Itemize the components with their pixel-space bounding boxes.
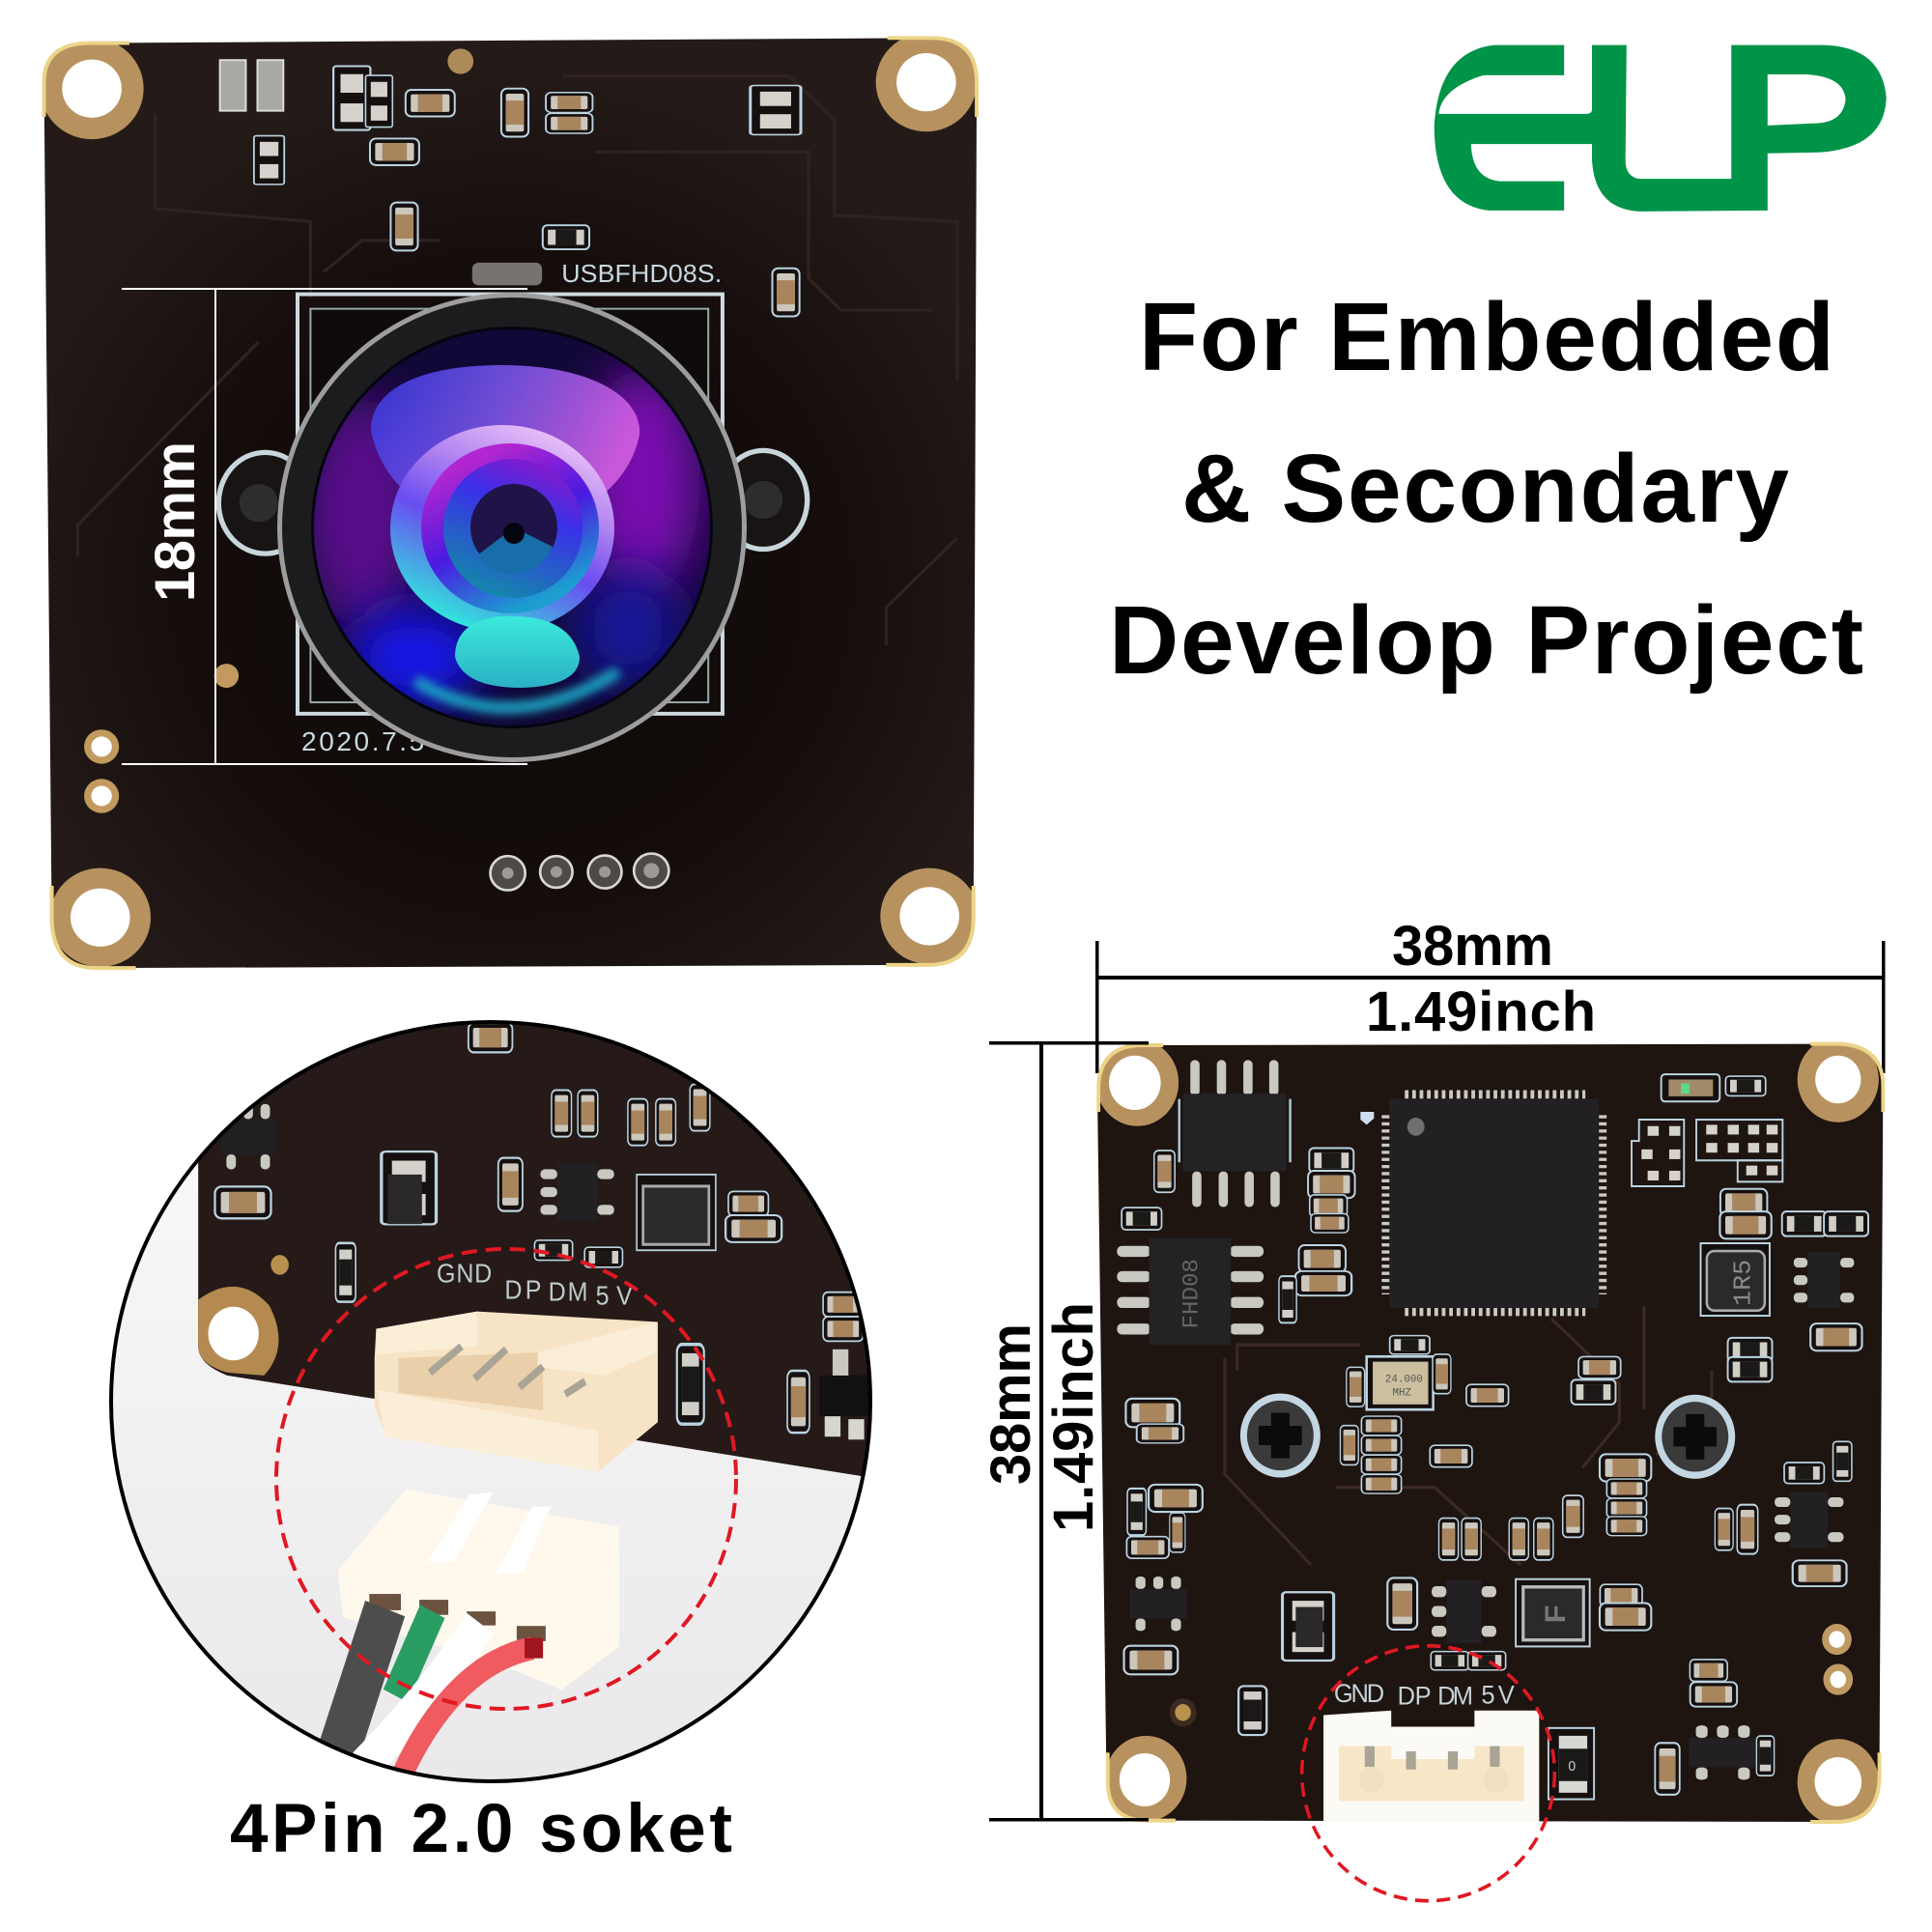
resistor beside connector xyxy=(1548,1728,1594,1800)
gold test points xyxy=(84,664,239,813)
inductor F xyxy=(1516,1579,1590,1646)
heading: for embedded and secondary develop project: Develop Project xyxy=(1109,586,1863,695)
heading: for embedded and secondary develop project: & Secondary xyxy=(1181,435,1789,543)
heading: for embedded and secondary develop project xyxy=(1109,283,1863,695)
close-up pin labels: DP xyxy=(504,1274,542,1305)
mounting screws xyxy=(1240,1393,1735,1479)
inductor F: F xyxy=(1541,1605,1572,1623)
red dashed circle xyxy=(1302,1646,1554,1901)
silkscreen: USBFHD08S: USBFHD08S. xyxy=(561,259,722,288)
gold test points rear xyxy=(1822,1624,1853,1695)
board connector socket xyxy=(375,1312,658,1471)
four LED pads xyxy=(491,854,668,891)
surface components xyxy=(220,48,801,317)
panel: camera board rear view xyxy=(1096,1037,1883,1901)
silkscreen pin labels: DM xyxy=(1437,1681,1473,1711)
crystal 24.000 MHZ: MHZ xyxy=(1392,1387,1411,1400)
dimension: board height 38mm xyxy=(980,1041,1149,1822)
resistor beside connector: 0 xyxy=(1568,1759,1576,1775)
small surface components xyxy=(1122,1076,1868,1795)
mounting holes xyxy=(41,33,979,968)
dimension: board height 38mm: 1.49inch xyxy=(1042,1302,1105,1532)
chip marked FHD08 xyxy=(1117,1238,1264,1345)
heading: for embedded and secondary develop project: For Embedded xyxy=(1139,283,1834,391)
chip marked FHD08: FHD08 xyxy=(1179,1259,1205,1328)
inductor 1R5: 1R5 xyxy=(1729,1260,1757,1306)
board outline xyxy=(44,38,977,968)
red dashed highlight xyxy=(276,1249,736,1709)
sensor holder xyxy=(218,263,808,714)
panel: connector close-up circle xyxy=(106,1003,906,1787)
icon: lens xyxy=(277,293,747,762)
dimension: board height 38mm: 38mm xyxy=(980,1323,1042,1485)
flash chip SOP8 xyxy=(1179,1060,1291,1207)
inductor 1R5 xyxy=(1700,1243,1770,1316)
silkscreen: 2020.7.5: 2020.7.5 xyxy=(301,726,424,756)
close-up photo xyxy=(106,1003,906,1787)
LED indicator xyxy=(1662,1074,1719,1101)
main processor chip xyxy=(1360,1094,1603,1312)
silkscreen pin labels: GND xyxy=(1334,1678,1384,1708)
dimension: board width 38mm xyxy=(1095,915,1886,1073)
logo: ELP xyxy=(1435,45,1887,212)
rear mounting pads xyxy=(1096,1037,1883,1825)
rear traces xyxy=(1225,1306,1712,1565)
silkscreen pin labels xyxy=(1334,1678,1515,1711)
caption: 4Pin 2.0 soket: 4Pin 2.0 soket xyxy=(230,1791,732,1867)
close-up pin labels xyxy=(438,1264,632,1305)
circle border xyxy=(111,1022,870,1781)
close-up circuit board xyxy=(198,1024,868,1476)
silkscreen pin labels: DP xyxy=(1398,1681,1432,1711)
close-up pin labels: DM xyxy=(549,1277,587,1307)
close-up mounting pad xyxy=(198,1287,278,1376)
close-up components xyxy=(215,1023,877,1439)
dimension: board width 38mm: 1.49inch xyxy=(1366,980,1596,1043)
white 4-pin connector xyxy=(1323,1711,1539,1822)
rear board outline xyxy=(1097,1044,1883,1822)
silkscreen pin labels: 5V xyxy=(1481,1680,1515,1710)
dimension: 18mm height: 18mm xyxy=(144,441,207,602)
dimension: board width 38mm: 38mm xyxy=(1392,915,1553,978)
pad clusters top right xyxy=(1632,1120,1782,1186)
crystal 24.000 MHZ xyxy=(1367,1356,1434,1409)
cable plug xyxy=(338,1490,619,1690)
crystal 24.000 MHZ: 24.000 xyxy=(1385,1374,1423,1385)
cable wires xyxy=(338,1608,543,1777)
close-up pin labels: GND xyxy=(437,1258,492,1289)
circuit traces xyxy=(77,76,957,645)
close-up pin labels: 5V xyxy=(596,1280,633,1311)
